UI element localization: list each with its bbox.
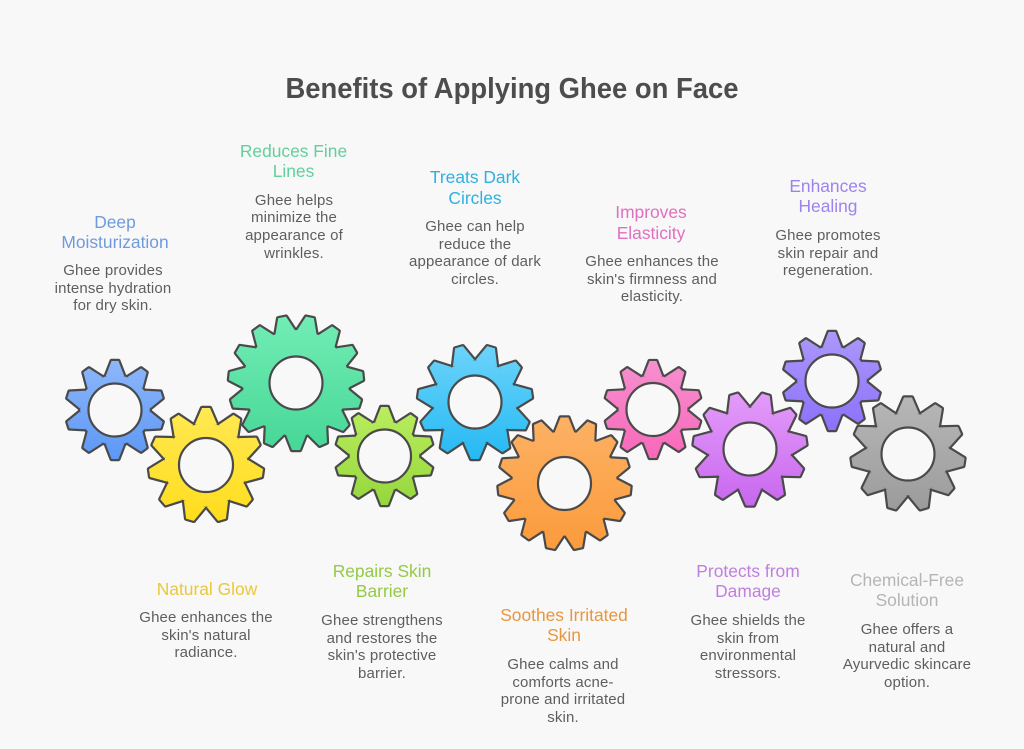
description: Ghee offers a (861, 621, 954, 638)
icon: lime gear (334, 404, 434, 508)
icon: pink gear (604, 358, 702, 460)
heading: Enhances (789, 176, 867, 196)
description: for dry skin. (73, 297, 153, 314)
title: Benefits of Applying Ghee on Face (286, 73, 738, 105)
description: natural and (869, 639, 945, 656)
icon: cyan gear (416, 344, 534, 462)
heading: Healing (799, 196, 857, 216)
description: skin repair and (778, 245, 878, 262)
description (843, 621, 971, 691)
description: Ghee strengthens (321, 612, 443, 629)
heading: Chemical-Free (850, 570, 964, 590)
description: comforts acne- (512, 674, 614, 691)
description: skin's firmness and (587, 271, 717, 288)
description: Ghee helps (255, 192, 333, 209)
description: Ghee can help (425, 218, 525, 235)
description (585, 253, 719, 305)
icon: yellow gear (146, 406, 266, 523)
panel: Treats Dark Circles (409, 167, 541, 288)
panel: Soothes Irritated Skin (500, 605, 628, 726)
panel: Deep Moisturization (55, 212, 171, 314)
heading (789, 176, 867, 216)
description (691, 612, 805, 682)
heading: Lines (273, 161, 315, 181)
heading: Solution (876, 590, 938, 610)
description: Ghee shields the (691, 612, 805, 629)
panel: Protects from Damage (691, 561, 805, 682)
heading: Circles (448, 188, 502, 208)
heading: Damage (715, 581, 781, 601)
description: appearance of dark (409, 253, 541, 270)
panel: Improves Elasticity (585, 202, 719, 305)
icon: green gear (226, 314, 366, 452)
description (501, 656, 625, 726)
description (775, 227, 881, 279)
heading: Barrier (356, 581, 408, 601)
panel: Enhances Healing (775, 176, 881, 279)
description: circles. (451, 271, 499, 288)
heading: Protects from (696, 561, 800, 581)
description (321, 612, 443, 682)
description: skin from (717, 630, 779, 647)
heading (430, 167, 520, 208)
description: barrier. (358, 665, 406, 682)
heading (615, 202, 687, 243)
description: radiance. (174, 644, 238, 661)
heading: Treats Dark (430, 167, 520, 187)
description: wrinkles. (263, 245, 324, 262)
description (139, 609, 273, 661)
description: appearance of (245, 227, 344, 244)
description: environmental (700, 647, 796, 664)
panel: Reduces Fine Lines (240, 141, 347, 262)
description: minimize the (251, 209, 337, 226)
description: option. (884, 674, 930, 691)
description (245, 192, 344, 262)
icon: violet gear (782, 330, 882, 432)
heading: Improves (615, 202, 687, 222)
description: skin's protective (328, 647, 436, 664)
description: reduce the (439, 236, 511, 253)
description: Ghee promotes (775, 227, 881, 244)
heading (61, 212, 169, 252)
description: skin. (547, 709, 579, 726)
description: Ghee enhances the (585, 253, 719, 270)
description: and restores the (327, 630, 437, 647)
icon: blue gear (65, 358, 165, 462)
description (409, 218, 541, 288)
description (55, 262, 171, 314)
heading (850, 570, 964, 610)
heading: Moisturization (61, 232, 169, 252)
heading (240, 141, 347, 181)
heading: Soothes Irritated (500, 605, 628, 625)
icon: gray gear (849, 395, 967, 512)
heading (696, 561, 800, 601)
panel: Chemical-Free Solution (843, 570, 971, 691)
description: skin's natural (161, 627, 251, 644)
description: intense hydration (55, 280, 171, 297)
panel: Natural Glow (139, 579, 273, 661)
icon: orange gear (496, 415, 633, 552)
panel: Repairs Skin Barrier (321, 561, 443, 682)
description: stressors. (715, 665, 781, 682)
description: Ayurvedic skincare (843, 656, 971, 673)
heading: Skin (547, 625, 581, 645)
heading (500, 605, 628, 645)
heading: Elasticity (617, 223, 686, 243)
heading: Repairs Skin (333, 561, 431, 581)
description: regeneration. (783, 262, 873, 279)
description: Ghee provides (63, 262, 163, 279)
heading (333, 561, 431, 601)
heading: Natural Glow (157, 579, 258, 599)
heading: Deep (94, 212, 136, 232)
heading: Reduces Fine (240, 141, 347, 161)
icon: purple gear (691, 392, 809, 508)
description: Ghee enhances the (139, 609, 273, 626)
description: elasticity. (621, 288, 683, 305)
description: Ghee calms and (507, 656, 619, 673)
description: prone and irritated (501, 691, 625, 708)
